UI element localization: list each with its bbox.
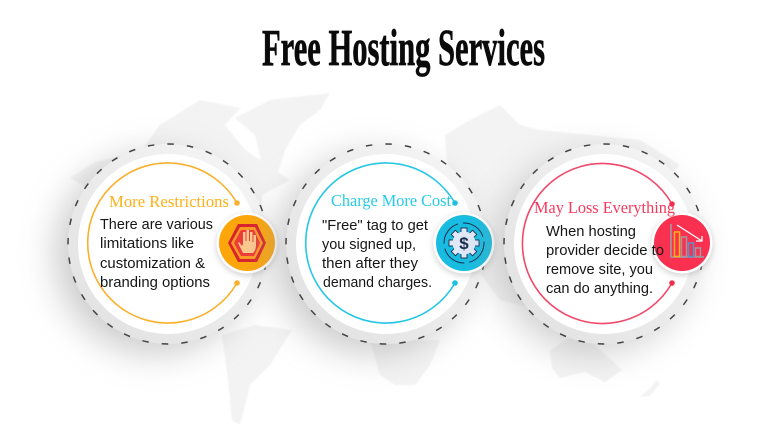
icon: stop hand [216, 212, 278, 276]
world map background [70, 93, 680, 425]
text: may loss everything: remove site, you [546, 261, 653, 278]
text: charge more cost: demand charges. [323, 274, 432, 291]
heading: more restrictions: More Restrictions [109, 192, 229, 211]
text: more restrictions: limitations like [100, 235, 194, 252]
text: charge more cost: you signed up, [322, 236, 416, 253]
heading: charge more cost: Charge More Cost [331, 191, 451, 210]
text: may loss everything: When hosting [546, 223, 636, 240]
text: more restrictions [100, 216, 213, 291]
text: may loss everything: provider decide to [546, 242, 664, 259]
text: may loss everything: can do anything. [546, 280, 653, 297]
icon: falling chart [651, 212, 713, 276]
icon: dollar gear [433, 212, 495, 276]
text: charge more cost: then after they [322, 255, 418, 272]
text: more restrictions: branding options [100, 274, 210, 291]
text: more restrictions: customization & [100, 255, 205, 272]
panel: more restrictions [55, 144, 278, 354]
icon: dollar gear: $ [459, 234, 469, 253]
text: charge more cost [322, 217, 432, 291]
text: may loss everything [546, 223, 664, 297]
panel: may loss everything [494, 144, 713, 354]
text: charge more cost: "Free" tag to get [322, 217, 429, 234]
text: more restrictions: There are various [100, 216, 213, 233]
heading: may loss everything: May Loss Everything [534, 198, 675, 217]
title: Free Hosting Services [262, 20, 545, 77]
panel: charge more cost [273, 144, 495, 354]
